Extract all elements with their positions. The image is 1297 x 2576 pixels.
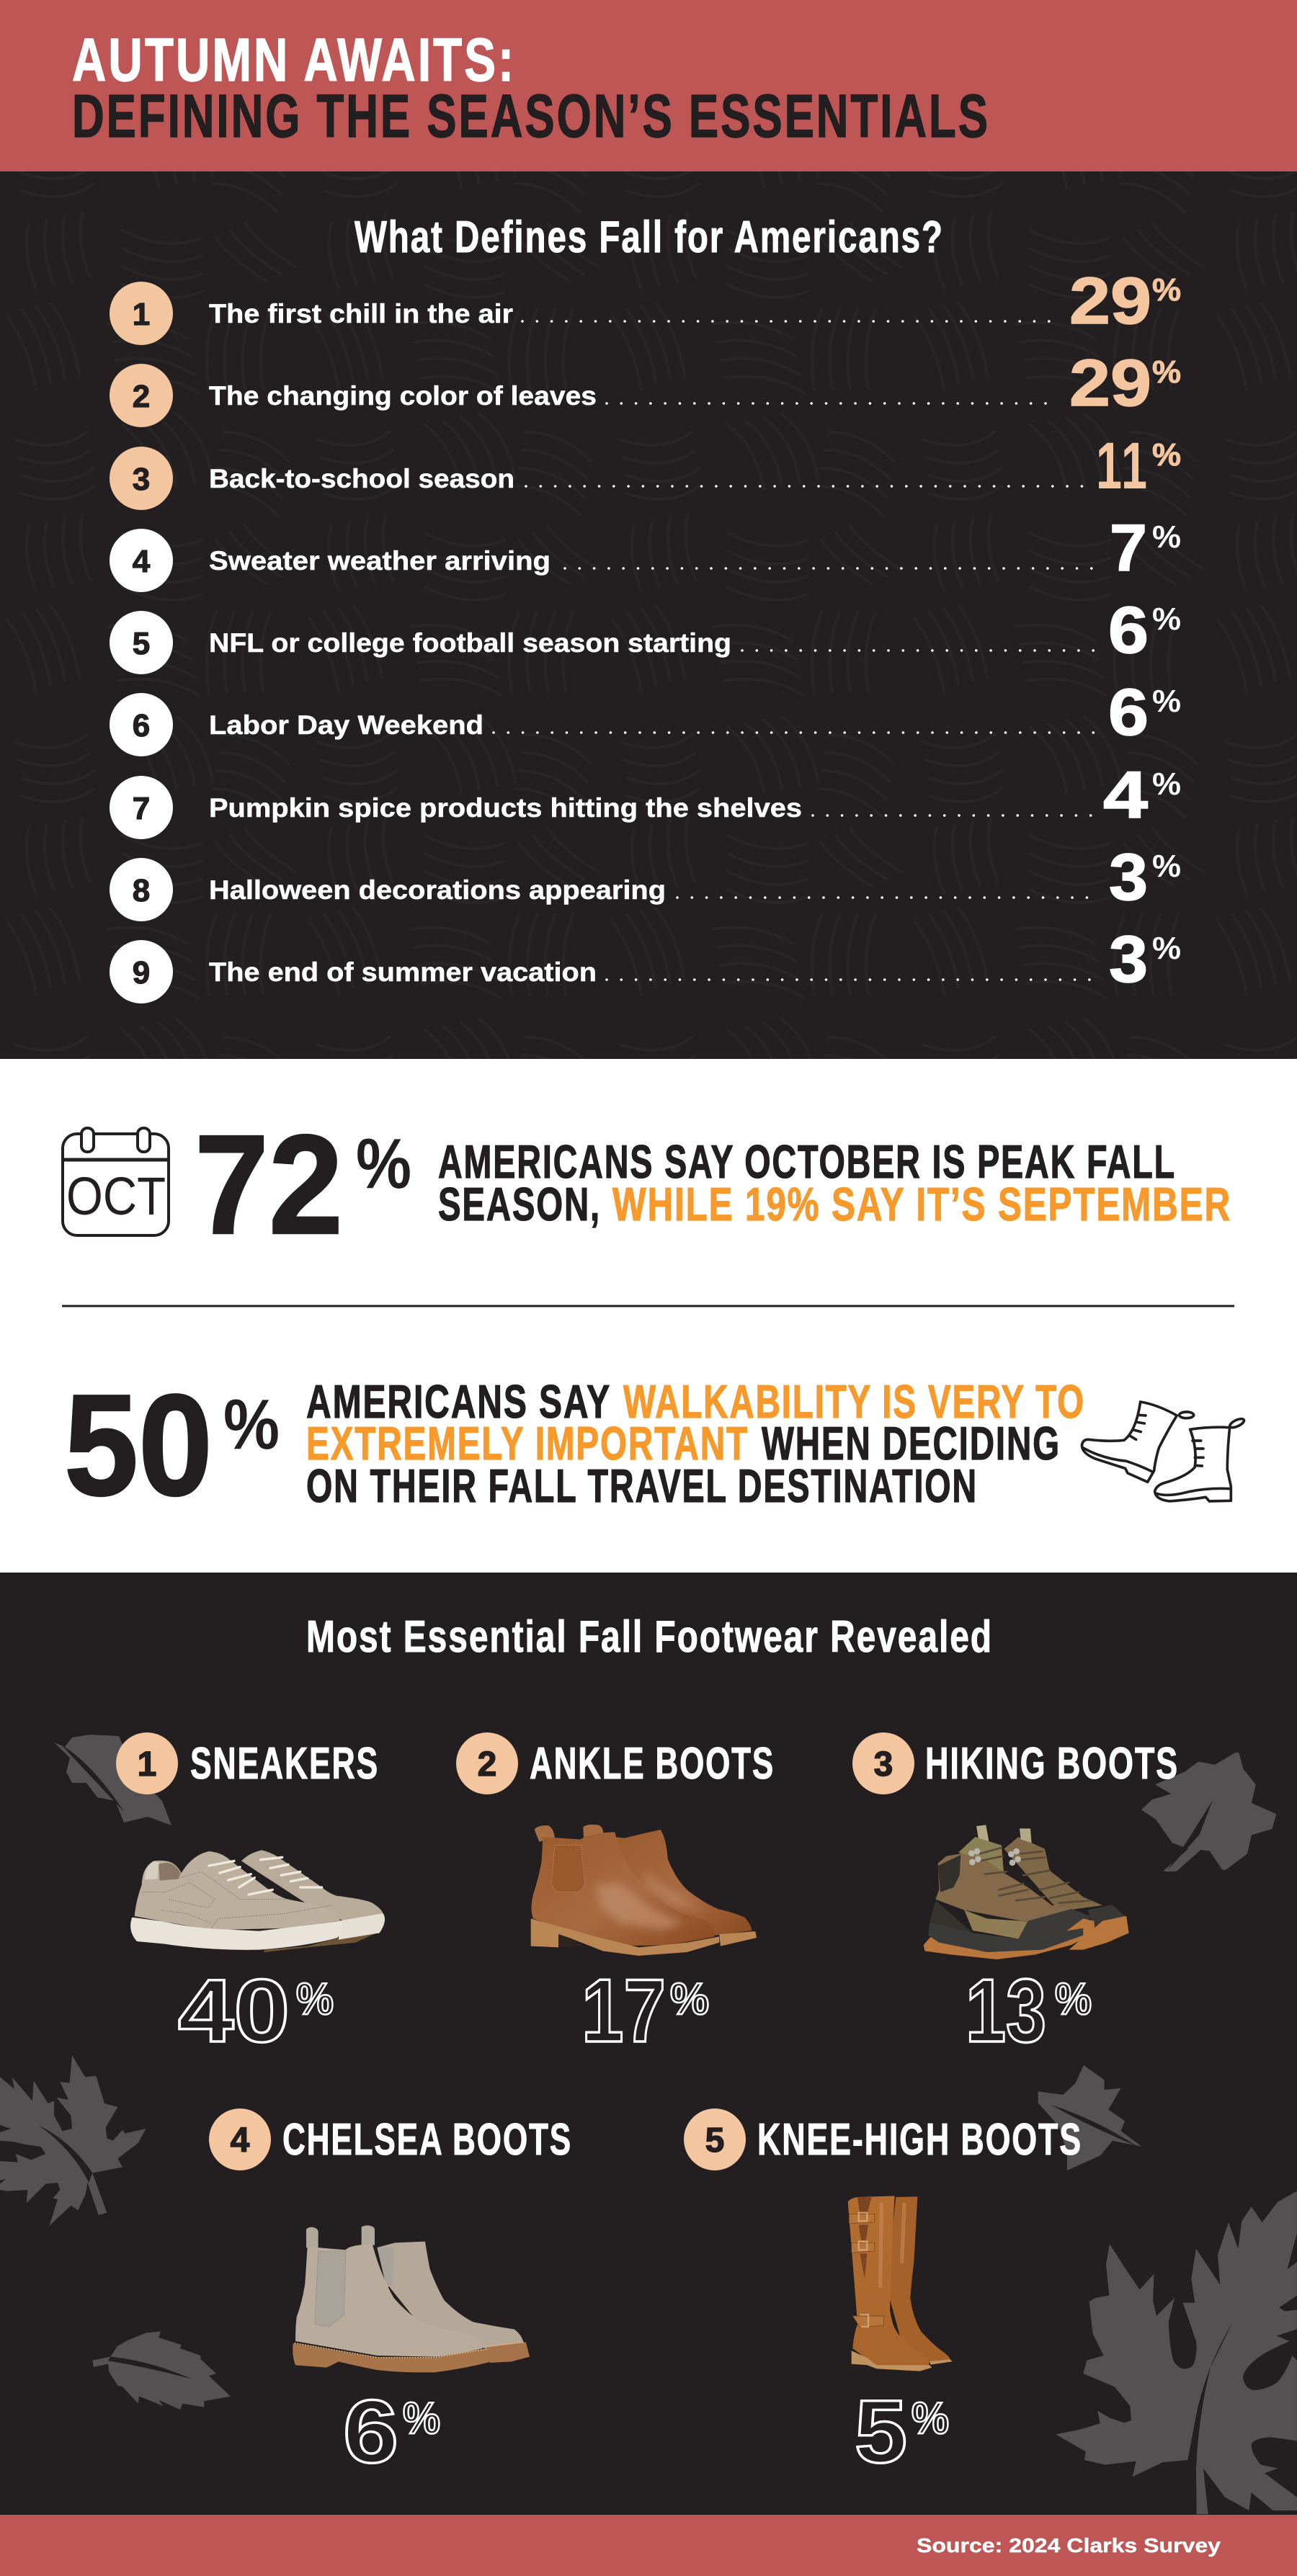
value: 6 percent: % xyxy=(403,2394,440,2443)
label: ankle boots: ANKLE BOOTS xyxy=(530,1739,775,1789)
value: 40 percent xyxy=(178,1962,334,2061)
stat: 72 percent: % xyxy=(356,1124,411,1203)
rank badge 4 xyxy=(209,2108,271,2170)
rank badge 2: 2 xyxy=(478,1745,496,1784)
heading: what defines fall: What Defines Fall for Americans? xyxy=(355,213,944,262)
icon: walking boots xyxy=(1082,1402,1245,1501)
text: walkability importance: EXTREMELY IMPORTANT xyxy=(306,1417,749,1470)
value: 40 percent: 40 xyxy=(178,1962,290,2061)
ranked row 3 xyxy=(110,429,1181,510)
rank badge 1 xyxy=(116,1732,178,1794)
value: 6 percent: 6 xyxy=(343,2382,398,2482)
leaf: top left xyxy=(54,1735,171,1825)
text: october peak season: SEASON, xyxy=(438,1178,601,1230)
ranked row 6: Labor Day Weekend xyxy=(209,710,483,740)
ranked row 4: Sweater weather arriving xyxy=(209,546,551,576)
value: 13 percent: 13 xyxy=(966,1962,1046,2061)
ranked row 9 xyxy=(110,923,1181,1003)
value: 5 percent: % xyxy=(912,2394,949,2443)
ranked row 4: % xyxy=(1152,519,1181,555)
leaf: top right xyxy=(1144,1753,1274,1871)
source note: Source: 2024 Clarks Survey xyxy=(917,2534,1221,2557)
ranked row 2: 2 xyxy=(133,379,150,414)
rank badge 3: 3 xyxy=(874,1745,893,1784)
leaf: left large xyxy=(0,2055,146,2226)
ranked row 1: The first chill in the air xyxy=(209,299,513,328)
ranked row 7: % xyxy=(1152,766,1181,802)
label: sneakers: SNEAKERS xyxy=(190,1739,379,1789)
leaf: centre right xyxy=(1038,2065,1141,2170)
image: knee-high boots xyxy=(848,2196,953,2371)
text: walkability importance: WALKABILITY IS VERY TO xyxy=(623,1375,1085,1428)
ranked row 6: 6 xyxy=(133,708,150,743)
rank badge 1: 1 xyxy=(138,1745,156,1784)
value: 17 percent: 17 xyxy=(581,1962,666,2061)
ranked row 2: % xyxy=(1152,354,1181,390)
ranked row 2 xyxy=(110,346,1181,427)
image: sneakers xyxy=(130,1850,385,1952)
ranked row 4: 7 xyxy=(1110,511,1147,585)
image: chelsea boots xyxy=(293,2225,530,2372)
label: chelsea boots: CHELSEA BOOTS xyxy=(282,2115,572,2165)
ranked row 1 xyxy=(110,264,1181,345)
ranked row 2: 29 xyxy=(1069,346,1151,420)
ranked row 7: 7 xyxy=(133,791,150,826)
ranked row 6 xyxy=(110,676,1181,756)
heading: footwear: Most Essential Fall Footwear Revealed xyxy=(306,1612,993,1662)
value: 40 percent: % xyxy=(296,1975,334,2024)
value: 13 percent: % xyxy=(1055,1975,1092,2024)
value: 5 percent xyxy=(855,2382,949,2482)
item: sneakers xyxy=(116,1732,385,2061)
ranked row 8: Halloween decorations appearing xyxy=(209,875,666,905)
label: knee-high boots: KNEE-HIGH BOOTS xyxy=(757,2115,1082,2165)
rank badge 3 xyxy=(852,1732,914,1794)
rank badge 4: 4 xyxy=(231,2121,250,2160)
text: walkability importance: AMERICANS SAY xyxy=(306,1375,611,1428)
title xyxy=(72,26,990,150)
leaf: lower left small xyxy=(92,2332,231,2410)
panel: header banner xyxy=(0,0,1297,171)
value: 6 percent xyxy=(343,2382,440,2482)
ranked row 6: 6 xyxy=(1108,676,1149,749)
ranked row 4 xyxy=(110,511,1181,592)
panel: what defines fall xyxy=(0,171,1297,1059)
ranked row 1: % xyxy=(1152,272,1181,308)
ranked row 6: % xyxy=(1152,684,1181,719)
text: october peak season xyxy=(438,1135,1231,1230)
ranked row 3: 1 xyxy=(1096,429,1122,503)
rank badge 2 xyxy=(456,1732,518,1794)
item: ankle boots xyxy=(456,1732,775,2061)
value: 17 percent: % xyxy=(670,1975,709,2024)
stat: 50 percent: % xyxy=(223,1385,280,1464)
text: walkability importance xyxy=(306,1375,1085,1512)
ranked row 3: Back-to-school season xyxy=(209,464,514,493)
icon: october calendar xyxy=(63,1128,169,1235)
ranked row 3: % xyxy=(1152,437,1181,473)
rank badge 5 xyxy=(684,2108,746,2170)
text: walkability importance: WHEN DECIDING xyxy=(762,1417,1061,1470)
label: hiking boots: HIKING BOOTS xyxy=(925,1739,1179,1789)
ranked row 5: % xyxy=(1152,601,1181,637)
ranked row 4: 4 xyxy=(133,544,151,579)
title: DEFINING THE SEASON’S ESSENTIALS xyxy=(72,82,990,150)
ranked row 5 xyxy=(110,594,1181,674)
ranked row 5: 6 xyxy=(1108,594,1149,667)
ranked row 9: % xyxy=(1152,931,1181,966)
ranked row 7: 4 xyxy=(1103,759,1148,832)
ranked row 9: The end of summer vacation xyxy=(209,957,597,987)
ranked row 8: 3 xyxy=(1109,841,1148,914)
title: AUTUMN AWAITS: xyxy=(72,26,516,94)
ranked row 5: 5 xyxy=(133,626,150,661)
ranked row 1: 1 xyxy=(133,297,150,332)
ranked row 5: NFL or college football season starting xyxy=(209,628,731,658)
ranked row 9: 3 xyxy=(1109,923,1148,996)
stat: 72 percent: 72 xyxy=(195,1106,343,1264)
value: 5 percent: 5 xyxy=(855,2382,907,2482)
text: walkability importance: ON THEIR FALL TRAVEL DESTINATION xyxy=(306,1459,978,1512)
ranked row 2: The changing color of leaves xyxy=(209,381,597,411)
leaf: bottom right large xyxy=(1056,2191,1297,2514)
image: ankle boots xyxy=(531,1825,757,1956)
panel: footwear xyxy=(0,1573,1297,2515)
ranked row 8: % xyxy=(1152,849,1181,884)
icon: october calendar: OCT xyxy=(66,1166,166,1226)
ranked row 8: 8 xyxy=(133,873,150,908)
ranked row 8 xyxy=(110,841,1181,921)
ranked row 3: 3 xyxy=(133,462,150,497)
item: chelsea boots xyxy=(209,2108,572,2482)
ranked row 7: Pumpkin spice products hitting the shelves xyxy=(209,793,802,823)
image: hiking boots xyxy=(924,1825,1129,1959)
ranked row 9: 9 xyxy=(133,955,150,990)
rank badge 5: 5 xyxy=(705,2121,724,2160)
ranked row 3: 1 xyxy=(1121,429,1147,503)
ranked row 1: 29 xyxy=(1069,264,1151,338)
stat: 50 percent: 50 xyxy=(64,1365,213,1526)
item: hiking boots xyxy=(852,1732,1179,2061)
panel: footer xyxy=(0,2515,1297,2576)
panel: statistics xyxy=(0,1059,1297,1573)
ranked row 7 xyxy=(110,759,1181,839)
item: knee-high boots xyxy=(684,2108,1082,2482)
